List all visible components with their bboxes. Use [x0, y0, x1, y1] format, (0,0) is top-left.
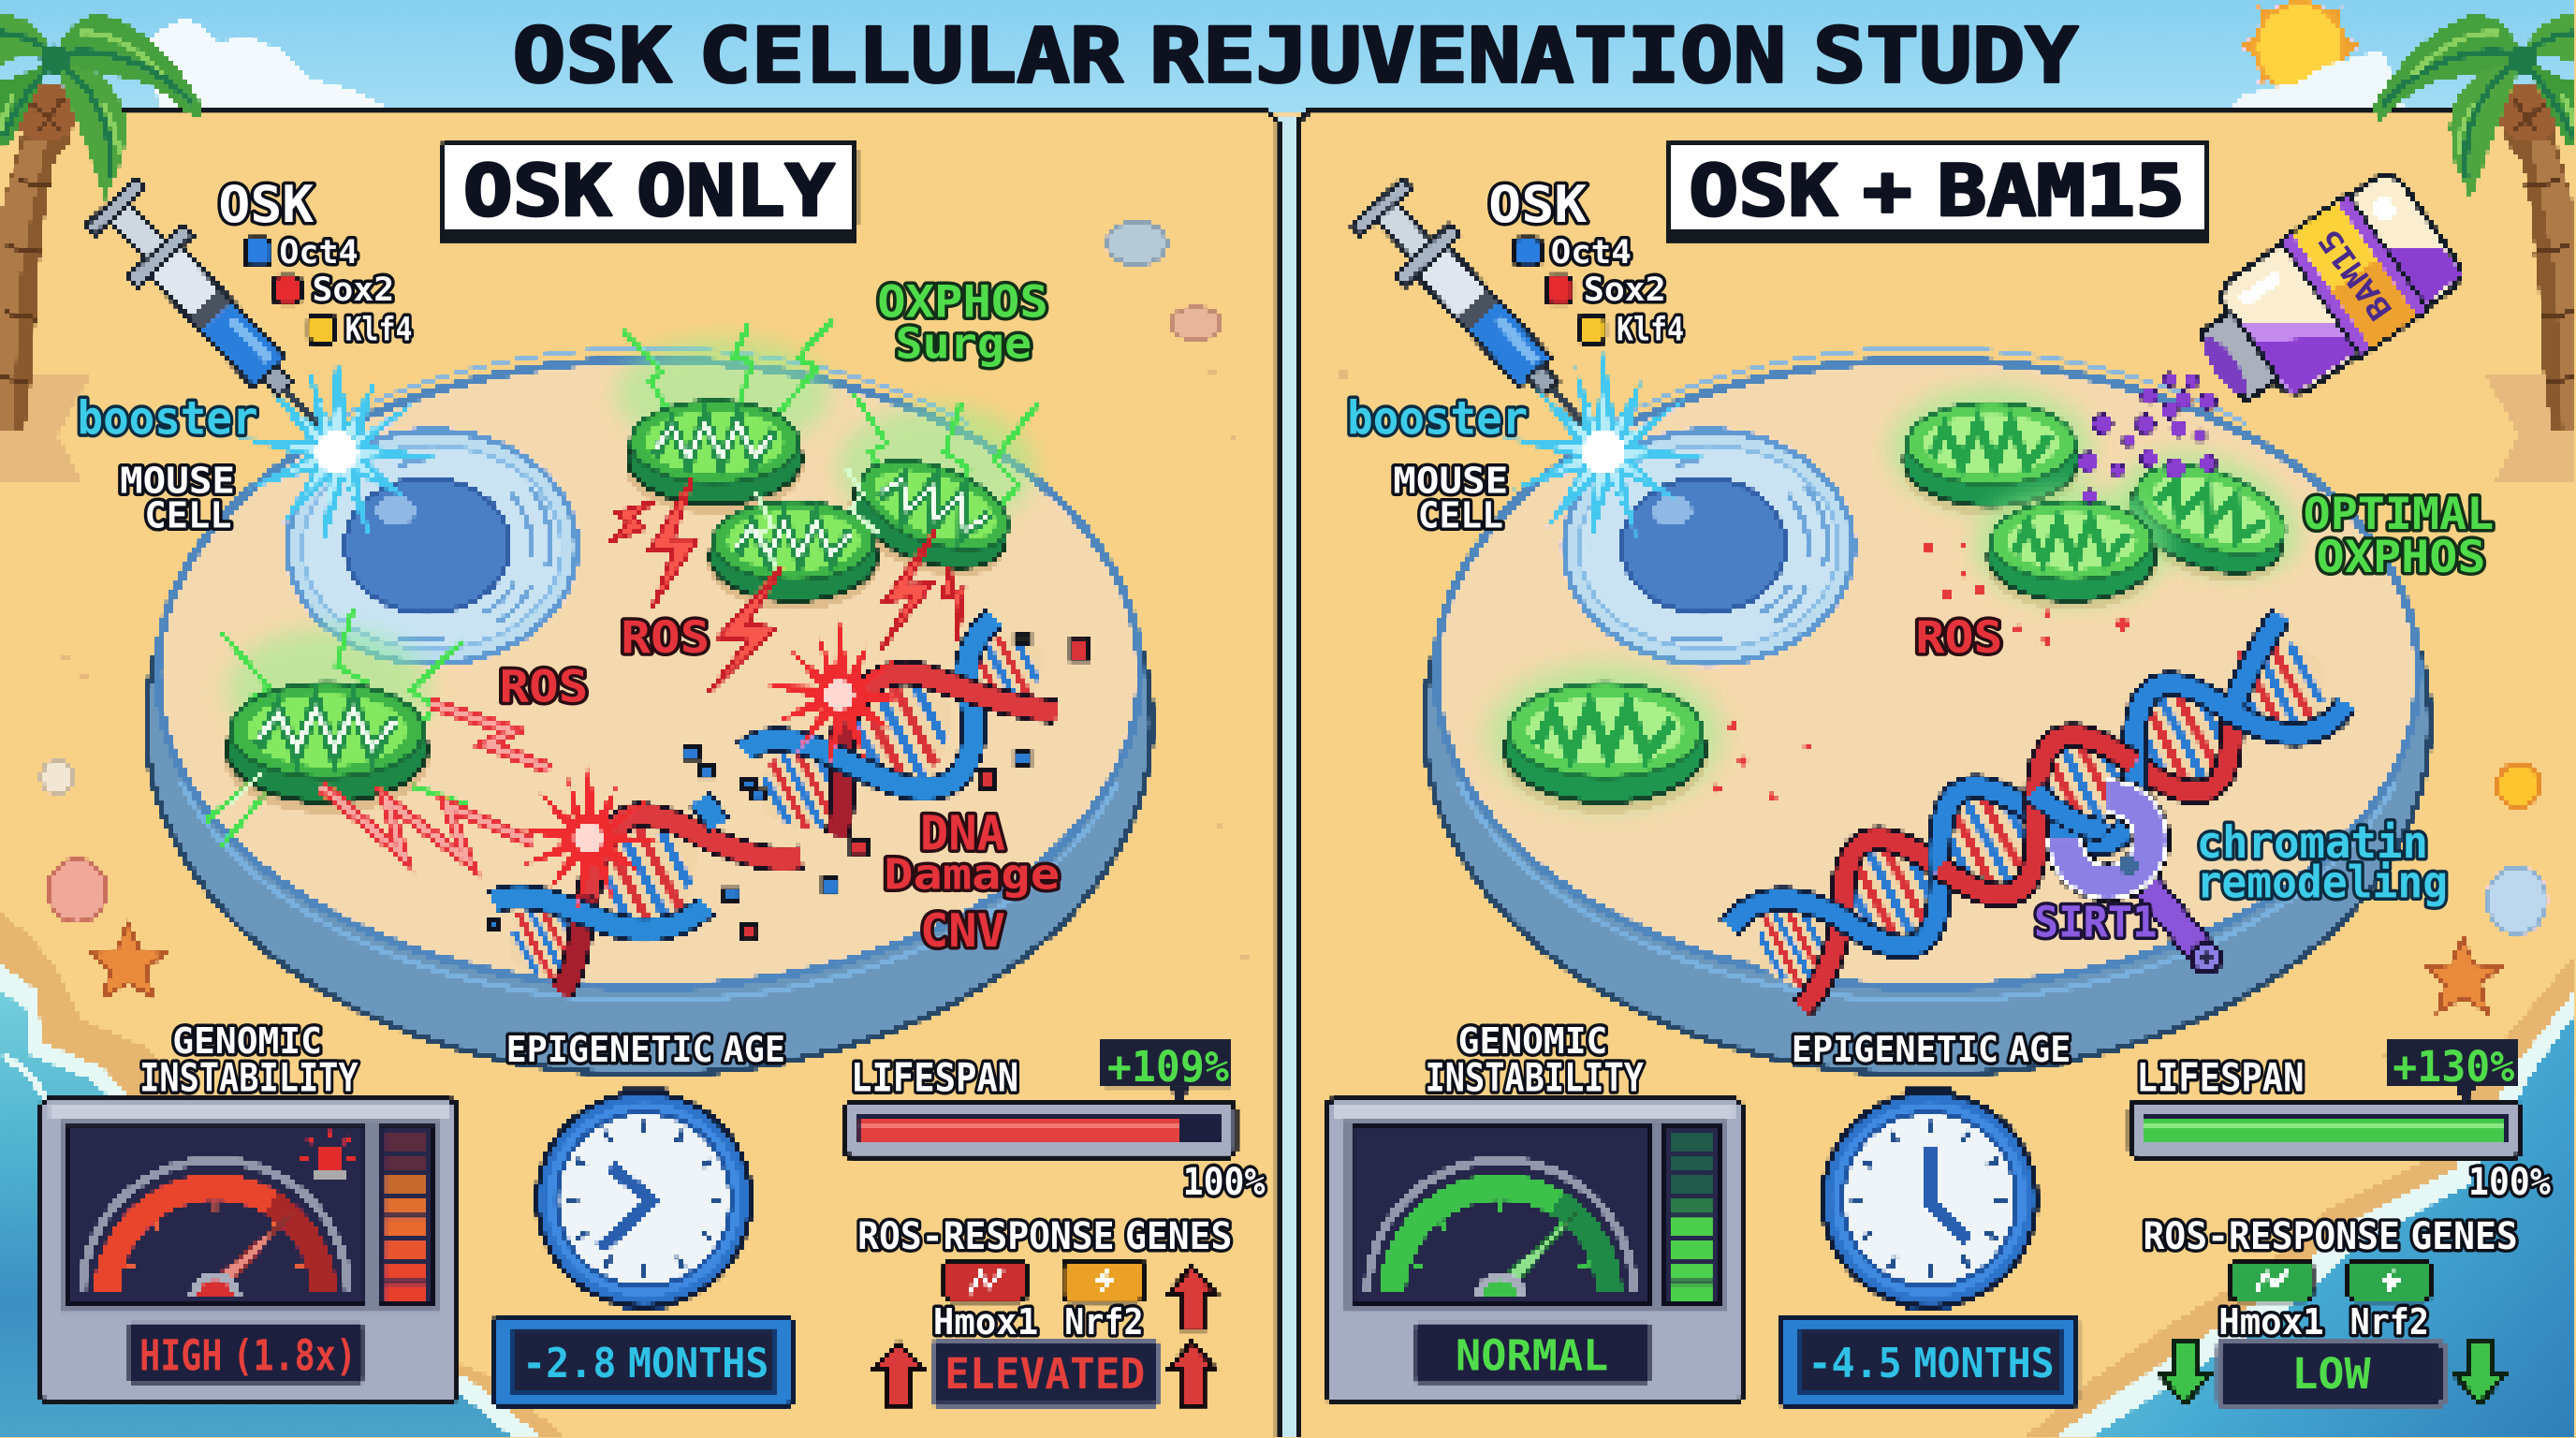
alarm beacon — [300, 1131, 357, 1180]
value lifespan: +130% — [2393, 1042, 2515, 1092]
label epigenetic age: EPIGENETIC AGE — [506, 1029, 785, 1071]
OSK factor dots — [1515, 238, 1605, 344]
impact splash — [237, 352, 437, 547]
label optimal: OPTIMAL — [2304, 489, 2494, 540]
shell: yellow — [2497, 764, 2539, 807]
value epigenetic age: -4.5 MONTHS — [1808, 1340, 2055, 1387]
BAM15 bottle — [2175, 165, 2470, 431]
healthy DNA helix — [1721, 608, 2352, 1020]
petri dish — [146, 348, 1151, 1075]
gauge panel — [1326, 1099, 1742, 1403]
title: OSK CELLULAR REJUVENATION STUDY — [513, 13, 2079, 101]
value genes elevated: ELEVATED — [944, 1349, 1145, 1399]
label ROS lower: ROS — [500, 661, 588, 712]
mitochondria — [1488, 386, 2318, 814]
label Hmox1: Hmox1 — [933, 1301, 1038, 1343]
ocean: right shore — [2024, 953, 2576, 1438]
ocean: left shore — [0, 912, 567, 1438]
label genomic: GENOMIC — [172, 1020, 322, 1063]
label 100 percent: 100% — [2468, 1160, 2551, 1204]
label instability: INSTABILITY — [1426, 1054, 1645, 1100]
shell: pale blue — [2487, 868, 2546, 933]
up arrows — [874, 1267, 1217, 1405]
BAM15 particles — [2078, 373, 2217, 503]
palm tree left — [0, 13, 204, 481]
label instability: INSTABILITY — [139, 1054, 359, 1100]
bottle label: BAM15 — [2311, 223, 2399, 327]
label booster: booster — [77, 390, 258, 445]
metrics labels — [1426, 1020, 2551, 1399]
label DNA: DNA — [920, 806, 1005, 861]
lifespan bar — [844, 1103, 1236, 1157]
lifespan callout — [1101, 1040, 1232, 1104]
epigenetic age readout box — [494, 1318, 792, 1405]
label remodeling: remodeling — [2197, 857, 2448, 908]
gauge panel — [41, 1099, 457, 1403]
label 100 percent: 100% — [1183, 1160, 1266, 1204]
mitochondria cluster — [225, 401, 1024, 814]
panel: OSK only — [41, 143, 1266, 1405]
label lifespan: LIFESPAN — [851, 1054, 1018, 1100]
value epigenetic age: -2.8 MONTHS — [522, 1340, 768, 1387]
long red bolts — [320, 703, 550, 861]
palm tree right — [2372, 13, 2576, 481]
heading: OSK ONLY — [463, 150, 835, 232]
label OXPHOS: OXPHOS — [877, 277, 1048, 329]
label cell: CELL — [144, 494, 231, 536]
green surge bolts — [205, 318, 1038, 846]
label Surge: Surge — [896, 319, 1032, 369]
sun — [2239, 0, 2361, 92]
label ROS genes: ROS-RESPONSE GENES — [2144, 1214, 2518, 1258]
red ROS bolts — [607, 477, 964, 694]
label cell: CELL — [1418, 494, 1503, 536]
clouds right — [2224, 50, 2407, 115]
label ROS upper: ROS — [621, 612, 710, 664]
shell: blue — [1107, 222, 1166, 265]
label epigenetic age: EPIGENETIC AGE — [1792, 1029, 2071, 1071]
sand speckles — [59, 370, 2392, 1058]
elevated status box — [933, 1343, 1158, 1405]
label mouse: MOUSE — [1393, 461, 1508, 503]
label chromatin: chromatin — [2197, 817, 2428, 869]
left panel labels — [77, 150, 1266, 1399]
label OXPHOS: OXPHOS — [2317, 532, 2485, 583]
label Nrf2: Nrf2 — [1064, 1301, 1144, 1343]
impact splash — [1503, 352, 1704, 547]
label Damage: Damage — [884, 850, 1060, 900]
SIRT1 wrench — [2034, 792, 2221, 973]
label Klf4: Klf4 — [345, 310, 413, 348]
right panel artwork — [1326, 143, 2521, 1405]
label Hmox1: Hmox1 — [2218, 1301, 2324, 1343]
label mouse: MOUSE — [120, 461, 235, 503]
low status box — [2218, 1343, 2444, 1405]
label Oct4: Oct4 — [1551, 233, 1632, 271]
label ROS genes: ROS-RESPONSE GENES — [857, 1214, 1232, 1258]
gene chips — [2231, 1260, 2431, 1301]
label CNV: CNV — [920, 903, 1005, 958]
label genomic: GENOMIC — [1458, 1020, 1607, 1063]
shell: scallop — [48, 859, 107, 922]
heading badge — [440, 143, 857, 242]
shell: pink — [1171, 307, 1221, 340]
shell: cream — [41, 761, 74, 794]
level bars — [386, 1134, 426, 1301]
damaged DNA fragment lower — [491, 799, 801, 996]
label Klf4: Klf4 — [1617, 310, 1684, 348]
value genomic instability: HIGH (1.8x) — [139, 1331, 357, 1381]
value genomic instability: NORMAL — [1456, 1331, 1608, 1381]
sky — [0, 0, 2576, 135]
value genes low: LOW — [2291, 1349, 2371, 1399]
syringe — [1350, 176, 1630, 470]
down arrows — [2160, 1341, 2505, 1403]
label ROS: ROS — [1915, 612, 2002, 664]
left panel artwork — [41, 143, 1236, 1405]
clouds left — [139, 17, 402, 115]
label booster: booster — [1347, 390, 1528, 445]
epigenetic age readout box — [1780, 1318, 2077, 1405]
syringe — [83, 176, 363, 470]
label Sox2: Sox2 — [312, 271, 394, 309]
mouse cell — [1564, 431, 1853, 664]
lifespan callout — [2386, 1040, 2518, 1104]
lifespan bar — [2130, 1103, 2521, 1157]
value lifespan: +109% — [1107, 1042, 1229, 1092]
label OSK: OSK — [218, 175, 314, 234]
heading badge — [1666, 143, 2210, 242]
starfish left — [91, 923, 166, 997]
DNA debris — [490, 633, 1088, 940]
label SIRT1: SIRT1 — [2034, 897, 2157, 946]
clock — [537, 1090, 751, 1310]
starfish right — [2425, 938, 2500, 1012]
right panel labels — [1347, 150, 2551, 1399]
petri dish — [1425, 348, 2430, 1075]
residual ROS dots — [1712, 541, 2130, 801]
label Nrf2: Nrf2 — [2350, 1301, 2429, 1343]
label OSK: OSK — [1488, 175, 1588, 234]
label lifespan: LIFESPAN — [2137, 1054, 2305, 1100]
heading: OSK + BAM15 — [1689, 150, 2185, 232]
OSK factor dots — [245, 238, 335, 344]
label Sox2: Sox2 — [1584, 271, 1666, 309]
panel: OSK + BAM15 — [1326, 143, 2551, 1405]
label Oct4: Oct4 — [279, 233, 359, 271]
gene chips — [944, 1260, 1145, 1301]
damaged DNA fragment upper — [740, 617, 1061, 850]
level bars — [1672, 1134, 1711, 1301]
DNA break explosions — [512, 619, 915, 910]
clock — [1822, 1090, 2036, 1310]
mouse cell — [287, 431, 577, 664]
white sparks on mitochondria — [230, 468, 879, 805]
